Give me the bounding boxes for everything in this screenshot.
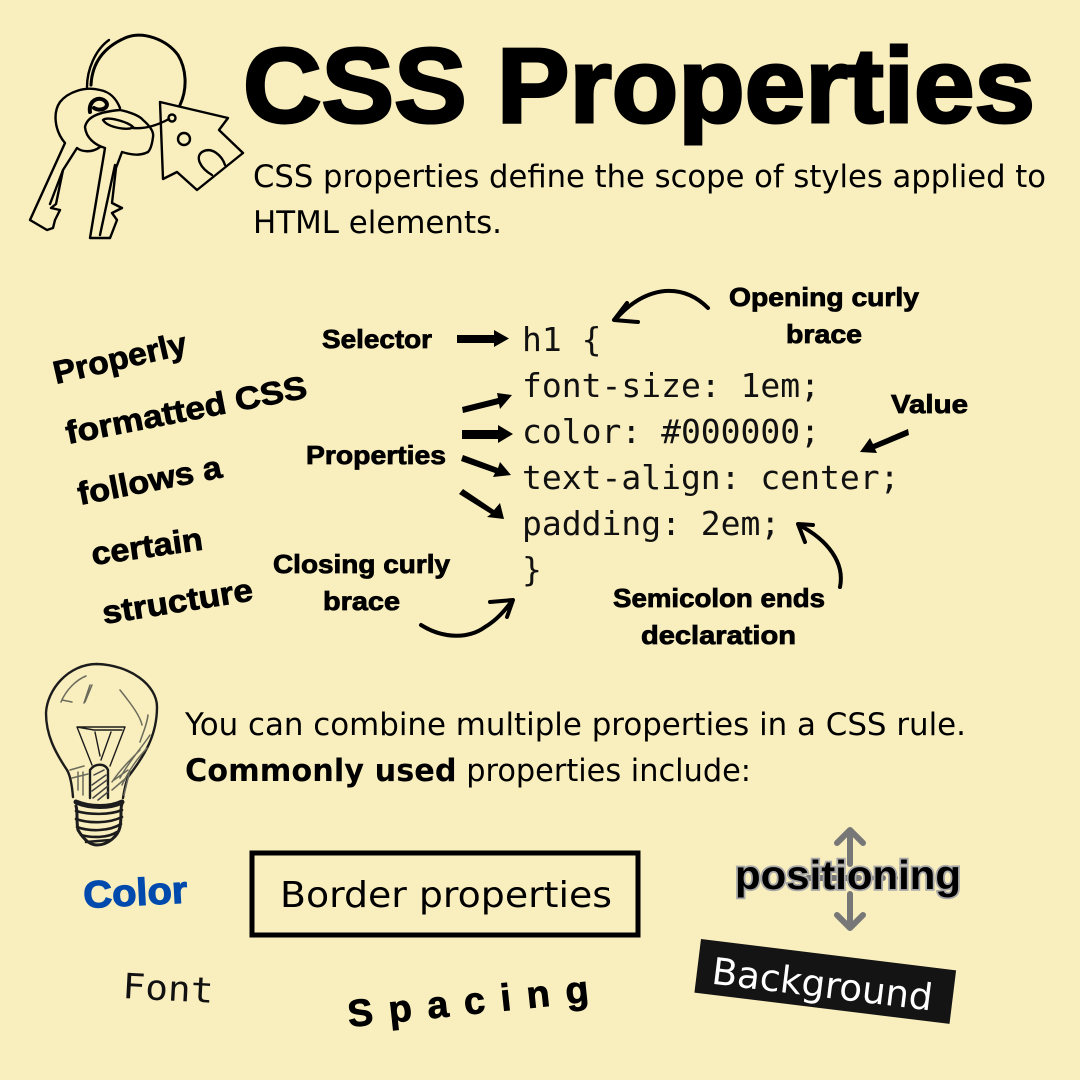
- code block: [522, 320, 900, 589]
- annotation labels: Opening curly: [729, 282, 920, 312]
- annotation labels: Properties: [306, 440, 446, 470]
- example: spacing: Spacing: [346, 969, 591, 1036]
- tilted heading: properly formatted CSS: follows a: [74, 449, 225, 512]
- code block: h1 {: [522, 320, 601, 359]
- annotation labels: [273, 282, 968, 650]
- title: CSS Properties: [243, 27, 1035, 145]
- tilted heading: properly formatted CSS: formatted CSS: [62, 369, 310, 451]
- arrow: font-size: [462, 393, 512, 413]
- annotation labels: Closing curly: [273, 549, 451, 579]
- annotation labels: brace: [786, 319, 862, 349]
- intro text: [253, 159, 1046, 241]
- example: positioning: [735, 830, 961, 928]
- code block: text-align: center;: [522, 458, 900, 497]
- arrow: opening brace: [614, 291, 708, 322]
- arrow: selector: [457, 330, 509, 347]
- code block: color: #000000;: [522, 412, 820, 451]
- arrow: value: [860, 429, 909, 453]
- tilted heading: properly formatted CSS: Properly: [49, 325, 190, 391]
- tilted heading: properly formatted CSS: structure: [99, 572, 255, 631]
- code block: }: [522, 550, 542, 589]
- arrows: [421, 291, 909, 636]
- arrow: text-align: [461, 455, 511, 477]
- example: border properties: [252, 853, 638, 935]
- example: background: Background: [710, 950, 935, 1019]
- arrow: closing brace: [421, 600, 513, 636]
- icon: keys on a ring: [30, 35, 243, 238]
- code block: font-size: 1em;: [522, 366, 820, 405]
- example: color: Color: [82, 870, 189, 917]
- arrow: color: [462, 425, 513, 443]
- intro text: CSS properties define the scope of styles applied to: [253, 159, 1046, 195]
- example: border properties: Border properties: [280, 875, 612, 916]
- code block: padding: 2em;: [522, 504, 780, 543]
- example: font: Font: [122, 967, 214, 1012]
- example: positioning: positioning: [735, 852, 961, 898]
- annotation labels: Value: [891, 389, 968, 419]
- combine text: [184, 707, 966, 789]
- combine text: You can combine multiple properties in a CSS rule.: [184, 707, 966, 743]
- arrow: padding: [459, 489, 504, 519]
- tilted heading: properly formatted CSS: [49, 325, 310, 631]
- icon: light bulb: [46, 664, 157, 845]
- annotation labels: brace: [323, 586, 400, 616]
- annotation labels: Semicolon ends: [613, 583, 825, 613]
- annotation labels: declaration: [641, 620, 796, 650]
- tilted heading: properly formatted CSS: certain: [89, 521, 205, 572]
- arrow: semicolon: [798, 524, 841, 587]
- combine text: Commonly used properties include:: [185, 753, 751, 789]
- annotation labels: Selector: [322, 324, 432, 354]
- intro text: HTML elements.: [253, 205, 502, 241]
